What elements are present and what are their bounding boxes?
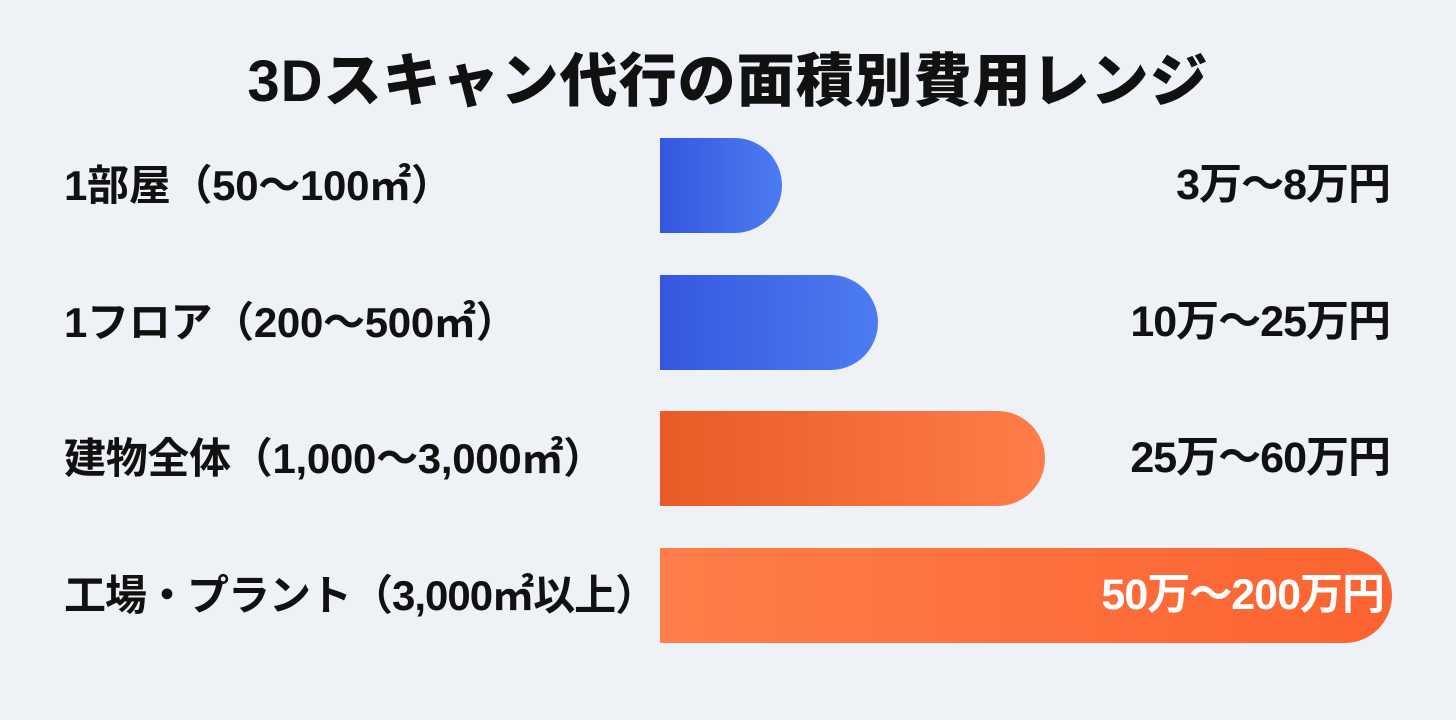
row 4 bar: [660, 548, 1392, 643]
row 3 value: 25万〜60万円: [1130, 434, 1390, 482]
title: 3Dスキャン代行の面積別費用レンジ: [247, 49, 1209, 114]
row 2 value: 10万〜25万円: [1130, 298, 1390, 346]
row 2 bar: [660, 275, 878, 370]
row 1 label: 1部屋（50〜100㎡）: [64, 162, 453, 209]
row 1 value: 3万〜8万円: [1176, 161, 1390, 209]
row 3 label: 建物全体（1,000〜3,000㎡）: [64, 435, 605, 482]
row 4 value: 50万〜200万円: [1101, 571, 1384, 619]
row 4 label: 工場・プラント（3,000㎡以上）: [64, 572, 656, 619]
row 1 bar: [660, 138, 782, 233]
row 3 bar: [660, 411, 1045, 506]
row 2 label: 1フロア（200〜500㎡）: [64, 299, 517, 346]
